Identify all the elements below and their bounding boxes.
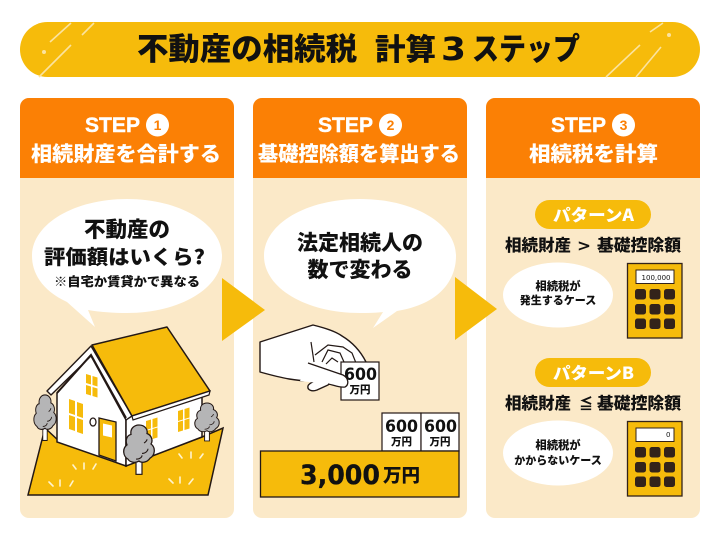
bubble A: 相続税が	[535, 278, 581, 294]
bubble A: 発生するケース	[520, 292, 596, 308]
step 2 header	[253, 98, 467, 178]
comparison A: 基礎控除額	[597, 232, 682, 256]
door	[99, 418, 116, 461]
comparison B	[505, 390, 682, 414]
side wall	[126, 395, 202, 466]
held card: 万円	[350, 382, 370, 397]
arrow: step 1 to 2	[222, 278, 265, 341]
banner glints right	[606, 23, 671, 77]
pattern B: パターンB	[553, 360, 634, 384]
speech bubble: statutory heirs: 数で変わる	[308, 254, 412, 284]
ground plot	[28, 428, 223, 495]
total bar	[260, 451, 459, 497]
held card	[341, 362, 379, 400]
stacked cards	[382, 413, 459, 451]
bubble B: かからないケース	[514, 452, 602, 468]
step 1 header: STEP	[85, 114, 140, 137]
tree centre	[124, 425, 154, 474]
pattern A	[503, 200, 682, 338]
bubble B: 相続税が	[535, 437, 581, 453]
round window	[90, 418, 96, 426]
comparison A: 相続財産	[505, 232, 571, 256]
pattern B	[503, 358, 682, 496]
comparison B: 相続財産	[505, 390, 571, 414]
tree left	[34, 395, 56, 440]
step 2 header: 2	[387, 117, 395, 133]
panel: step 2	[253, 98, 467, 518]
total bar: 3,000	[300, 460, 380, 491]
stacked cards: 万円	[430, 434, 450, 449]
step 2 header: 基礎控除額を算出する	[258, 137, 460, 167]
comparison A: >	[577, 236, 591, 255]
calculator A: 100,000	[642, 274, 670, 282]
calculator B: 0	[666, 431, 670, 439]
illustration: house	[28, 327, 223, 495]
title text: 計算	[375, 25, 436, 69]
window lower	[69, 399, 83, 434]
step 2 header: STEP	[318, 114, 373, 137]
bubble B	[503, 420, 613, 486]
thumb over card	[300, 363, 348, 388]
stacked cards: 600	[424, 417, 457, 436]
panel: step 3	[486, 98, 700, 518]
comparison B: ≦	[579, 393, 593, 414]
grass marks	[49, 452, 203, 486]
gable inner line	[57, 355, 126, 418]
title banner	[20, 22, 700, 77]
speech bubble: property value: 不動産の	[84, 213, 170, 244]
finger lines	[311, 342, 356, 364]
door window	[103, 424, 112, 438]
title text: 3	[441, 30, 466, 68]
calculator A	[628, 264, 682, 338]
tree right	[195, 403, 219, 441]
speech bubble: statutory heirs: 法定相続人の	[297, 227, 423, 257]
comparison A	[505, 232, 682, 256]
roof	[92, 327, 210, 416]
speech bubble: property value	[32, 199, 222, 327]
stacked cards: 万円	[391, 434, 412, 449]
speech bubble: statutory heirs	[264, 199, 456, 328]
calculator B	[628, 422, 682, 496]
arrow: step 2 to 3	[455, 277, 497, 340]
comparison B: 基礎控除額	[597, 390, 682, 414]
stacked cards: 600	[385, 417, 418, 436]
step 3 header: STEP	[551, 114, 606, 137]
bargeboard	[47, 346, 132, 420]
side windows	[146, 408, 190, 441]
title text: ステップ	[472, 24, 580, 69]
step 3 header: 3	[620, 117, 628, 133]
panel: step 1	[20, 98, 234, 518]
step 1 header	[20, 98, 234, 178]
pattern A: パターンA	[553, 202, 635, 226]
banner glints left	[39, 23, 94, 77]
total bar: 万円	[383, 462, 420, 488]
hand outline	[260, 325, 366, 391]
held card: 600	[344, 365, 377, 384]
illustration: hand holding card	[260, 325, 379, 400]
speech bubble: property value: 評価額はいくら?	[44, 241, 205, 270]
title text: 不動産の相続税	[137, 24, 357, 69]
step 1 header: 1	[154, 117, 162, 133]
thumb line	[308, 363, 348, 387]
house walls	[57, 355, 126, 466]
step 3 header	[486, 98, 700, 178]
bubble A	[503, 262, 613, 328]
speech bubble: property value: ※自宅か賃貸かで異なる	[54, 271, 200, 290]
window upper	[86, 374, 98, 398]
step 1 header: 相続財産を合計する	[31, 137, 221, 167]
step 3 header: 相続税を計算	[529, 137, 658, 167]
eave	[132, 391, 210, 420]
title text	[137, 24, 580, 69]
